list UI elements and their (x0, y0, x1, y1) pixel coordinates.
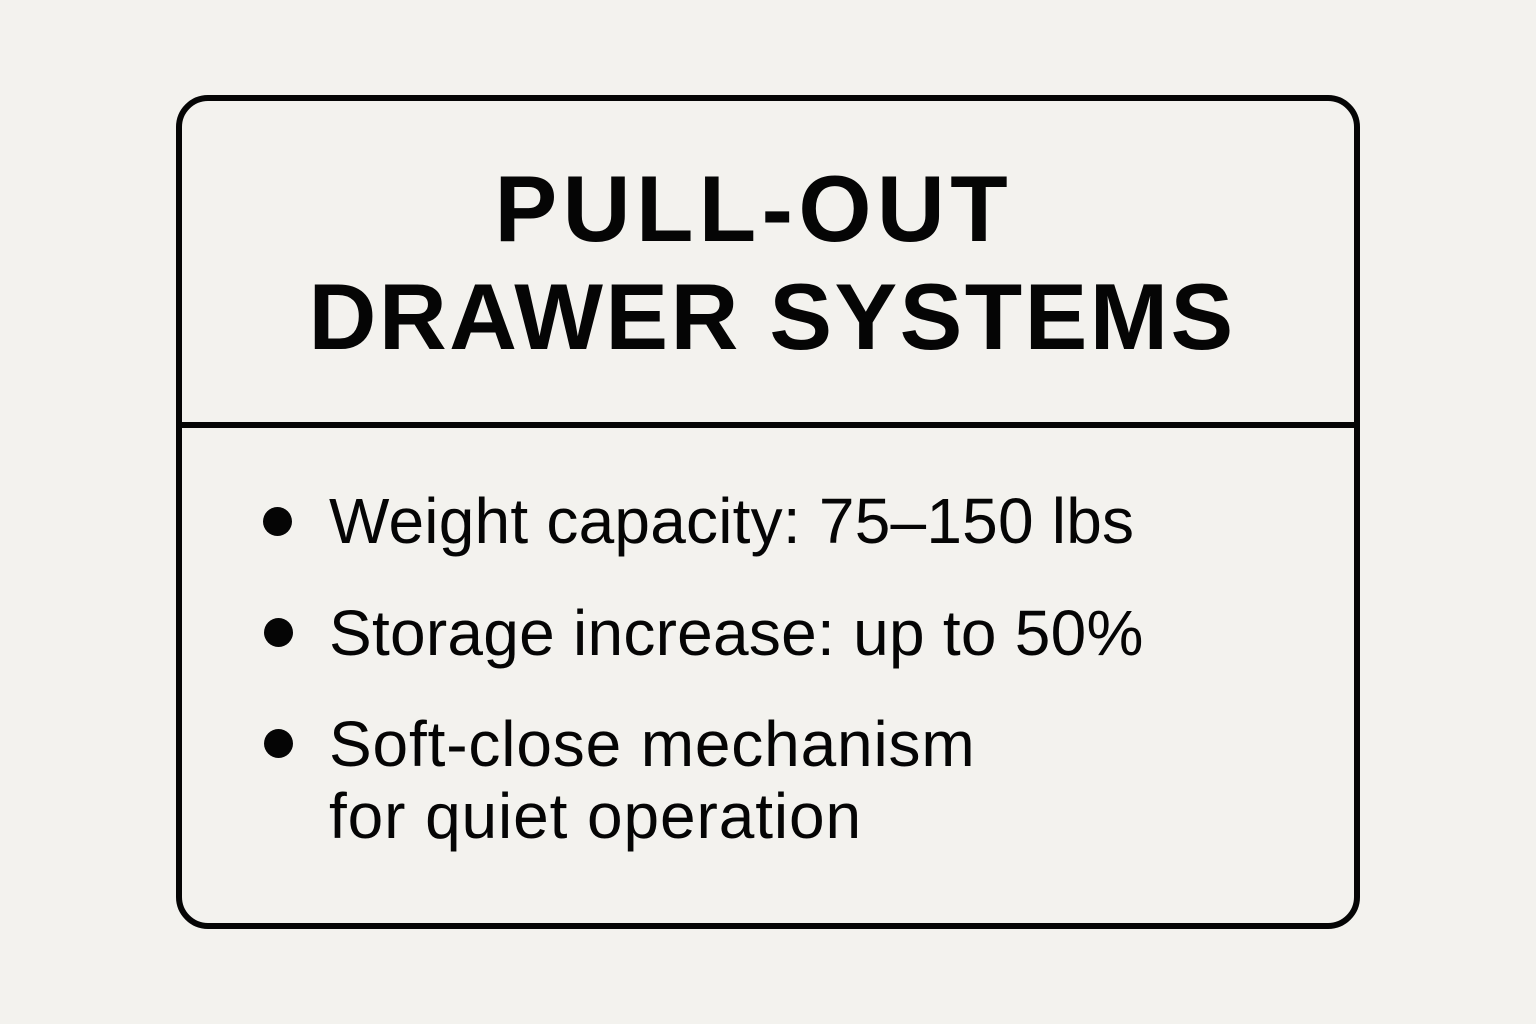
divider line (178, 422, 1358, 428)
bullet: soft-close mechanism (264, 708, 976, 852)
bullet list (263, 485, 1144, 852)
bullet: weight capacity: Weight capacity: 75–150 lbs (329, 485, 1134, 557)
title: PULL-OUT (494, 156, 1013, 261)
bullet: soft-close mechanism: Soft-close mechanism (329, 708, 976, 780)
title: DRAWER SYSTEMS (308, 264, 1236, 369)
panel: card outline (176, 95, 1360, 929)
title (308, 156, 1236, 369)
bullet: soft-close mechanism: for quiet operation (329, 780, 862, 852)
bullet: storage increase: Storage increase: up to 50% (329, 597, 1144, 669)
